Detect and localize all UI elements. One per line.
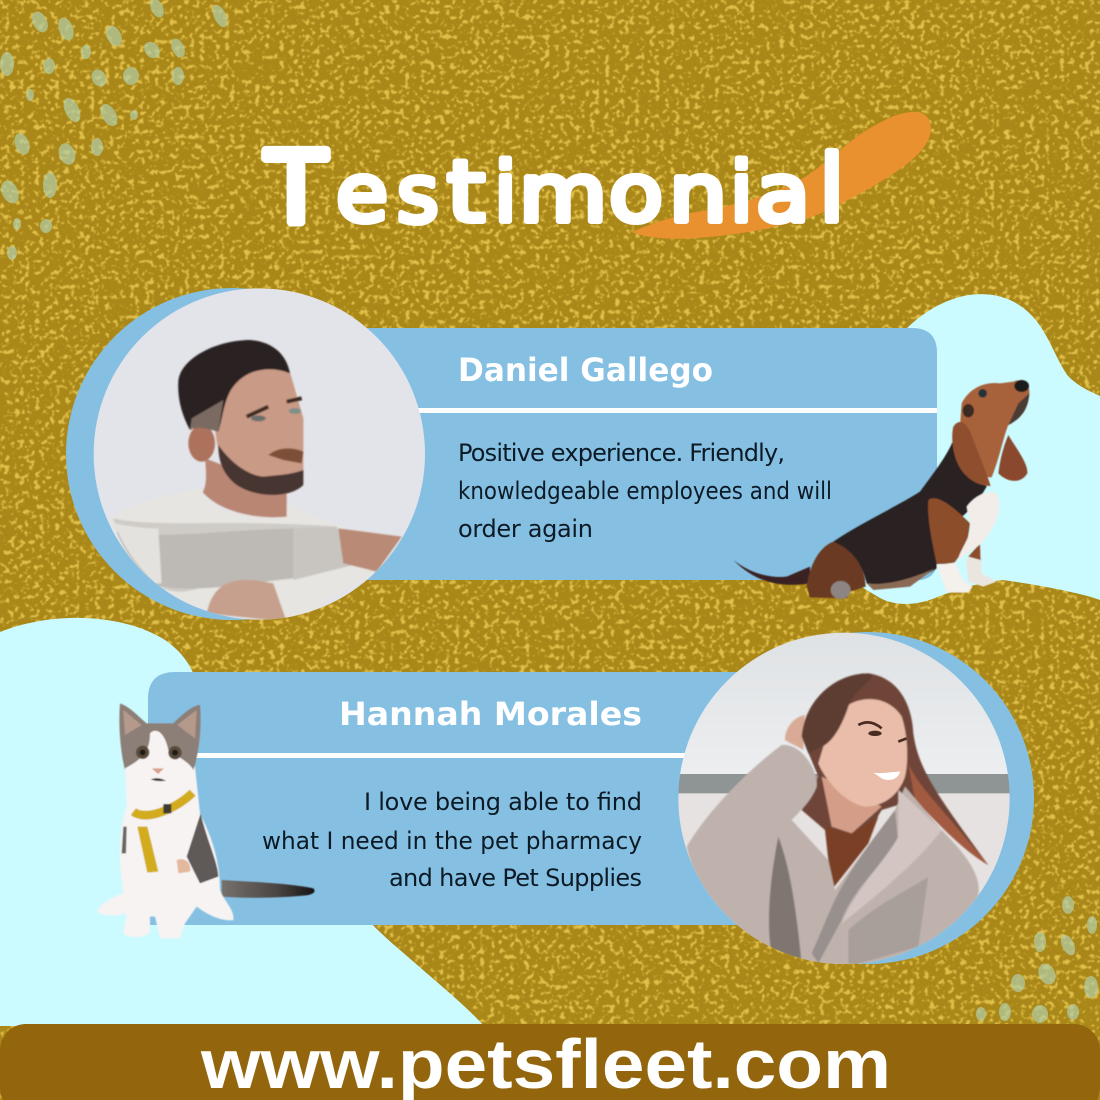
portrait: woman	[675, 630, 1015, 970]
sweater	[120, 516, 373, 618]
footer bar	[0, 1024, 1100, 1100]
beard	[218, 445, 303, 495]
mouth	[151, 778, 166, 781]
testimonial text: I love being able to find	[364, 788, 642, 816]
sleeve	[113, 518, 353, 592]
nose	[1014, 380, 1029, 392]
decorative dots top left	[0, 0, 231, 260]
hand	[785, 715, 805, 750]
testimonial text: Positive experience. Friendly,	[458, 439, 785, 467]
icon: basset hound	[733, 380, 1029, 599]
face	[125, 731, 193, 799]
testimonial text	[458, 439, 832, 543]
tail	[733, 560, 810, 585]
pale blue blob left	[0, 618, 484, 1026]
eyes	[136, 746, 149, 759]
eyes	[247, 398, 302, 417]
testimonial text: and have Pet Supplies	[389, 864, 642, 892]
title: i	[494, 146, 517, 241]
body	[833, 440, 987, 584]
head	[119, 703, 201, 770]
nose	[152, 768, 164, 774]
testimonial text: order again	[458, 515, 593, 543]
body	[97, 767, 233, 938]
pale blue blob right	[850, 294, 1100, 604]
title: e	[336, 147, 388, 240]
divider	[190, 753, 710, 758]
testimonial text	[262, 788, 642, 892]
haunch	[807, 542, 866, 598]
ear	[188, 425, 215, 462]
card: Hannah Morales	[148, 672, 750, 925]
far ear	[998, 435, 1027, 481]
smile	[873, 772, 900, 780]
title: l	[819, 136, 845, 243]
title: i	[730, 146, 753, 241]
coat lower shadow	[848, 877, 928, 967]
eye	[978, 389, 987, 398]
coat	[687, 745, 979, 970]
yellow harness	[133, 793, 193, 815]
coat shadow	[769, 837, 802, 963]
card background	[148, 672, 750, 925]
title: T	[265, 132, 327, 246]
hair	[178, 340, 290, 432]
eye patch	[963, 404, 974, 417]
name: Hannah Morales	[339, 695, 642, 733]
title: o	[609, 147, 663, 240]
portrait: man	[90, 285, 430, 625]
paw	[831, 581, 851, 599]
muzzle shadow	[1008, 393, 1029, 425]
face	[215, 368, 303, 492]
lower arm	[207, 580, 287, 622]
neck	[203, 458, 287, 517]
blue circle behind woman	[702, 632, 1034, 964]
title: a	[756, 147, 810, 240]
neck	[822, 777, 882, 833]
dress	[825, 817, 878, 890]
head	[960, 380, 1029, 477]
decorative dots bottom right	[976, 896, 1098, 1023]
chest	[957, 492, 999, 561]
card background	[300, 328, 937, 580]
side markings	[187, 813, 218, 883]
face	[818, 699, 907, 807]
title: s	[397, 148, 439, 241]
moustache	[268, 448, 303, 463]
divider	[400, 408, 937, 413]
ears inner	[123, 710, 197, 738]
name: Daniel Gallego	[458, 351, 713, 389]
collar	[812, 810, 898, 963]
orange brush stroke	[632, 112, 931, 239]
title	[265, 132, 845, 246]
title: t	[447, 143, 485, 242]
tail	[222, 880, 315, 898]
near ear	[952, 422, 991, 486]
title: m	[519, 147, 607, 240]
back leg	[966, 543, 997, 587]
title: n	[669, 147, 727, 240]
blue circle behind man	[66, 288, 398, 620]
icon: kitten	[97, 703, 315, 938]
testimonial text: what I need in the pet pharmacy	[262, 827, 642, 855]
card: Daniel Gallego	[300, 328, 937, 580]
front leg	[937, 563, 973, 593]
hairline	[802, 673, 872, 753]
shoulder	[928, 498, 970, 564]
eyes	[858, 722, 907, 742]
forearm	[338, 528, 402, 572]
testimonial text: knowledgeable employees and will	[458, 477, 832, 505]
hair	[801, 672, 988, 865]
buckles	[163, 804, 171, 813]
